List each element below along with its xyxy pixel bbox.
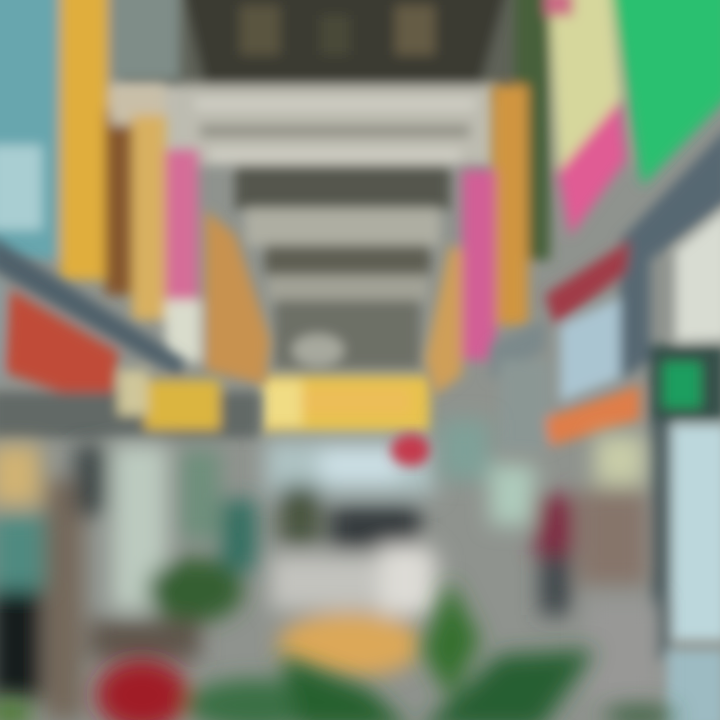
- lower right shops and shopper: [440, 420, 660, 700]
- middle of the hall: [265, 440, 440, 677]
- foreground plants and red flowers: [0, 580, 676, 720]
- left beam and red sign: [0, 235, 260, 438]
- yellow sign: far end of the hall: [262, 376, 430, 432]
- left storefronts: [0, 0, 270, 385]
- right beam and signs: [490, 125, 720, 720]
- small red sign: [391, 434, 431, 466]
- ceiling: dark skylight with trusses: [110, 0, 540, 368]
- right storefronts: [425, 0, 720, 395]
- lower left shops: [0, 445, 256, 720]
